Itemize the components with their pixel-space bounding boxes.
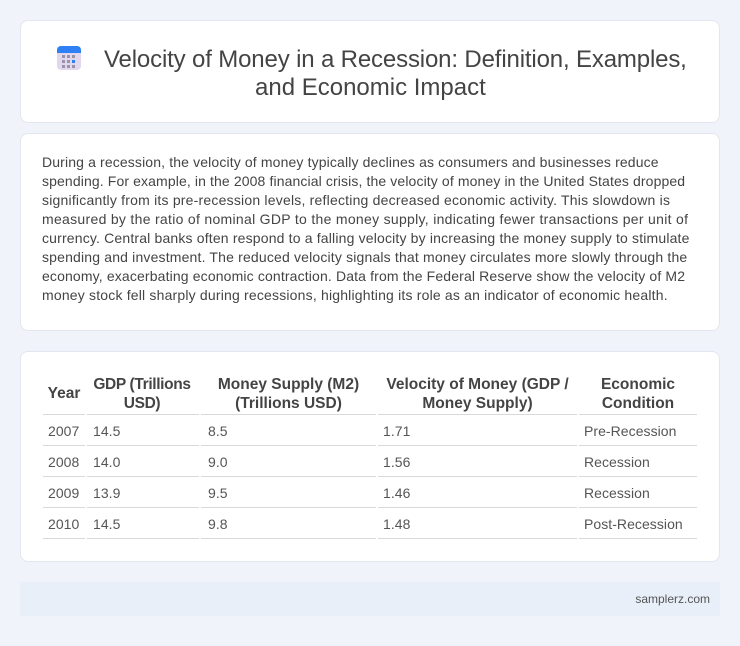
table row: 2010: 2010	[48, 516, 79, 532]
text block: description	[42, 154, 690, 303]
footer bar	[20, 582, 720, 616]
table header: Money Supply)	[422, 395, 533, 412]
table header: Condition	[602, 395, 674, 412]
table row: 2009: 13.9	[93, 485, 120, 501]
table row: 2008: Recession	[584, 454, 650, 470]
table row: 2009	[43, 485, 697, 508]
table row: 2010: 1.48	[383, 516, 410, 532]
table row: 2007: Pre-Recession	[584, 423, 676, 439]
table row: 2010	[43, 516, 697, 539]
table row: 2010: Post-Recession	[584, 516, 683, 532]
table row: 2010: 14.5	[93, 516, 120, 532]
icon: calendar	[57, 46, 81, 70]
panel: description	[20, 133, 720, 331]
table row: 2008: 1.56	[383, 454, 410, 470]
table row: 2008: 14.0	[93, 454, 120, 470]
table header: Velocity of Money (GDP /	[386, 376, 569, 393]
table row: 2009: Recession	[584, 485, 650, 501]
text block: description: money stock fell sharply during recessions, highlighting its role as an indicator of economic health.	[42, 287, 668, 303]
panel: data table	[20, 351, 720, 562]
text block: description: economy, exacerbating economic contraction. Data from the Federal Reserve show the velocity of M2	[42, 268, 685, 284]
table header: USD)	[124, 395, 160, 412]
footer text: samplerz.com	[635, 592, 710, 606]
panel: title	[20, 20, 720, 123]
table header: GDP (Trillions	[93, 376, 191, 393]
table header: Economic	[601, 376, 675, 393]
heading: line 1: Velocity of Money in a Recession: Definition, Examples,	[104, 46, 687, 73]
table row: 2007: 2007	[48, 423, 79, 439]
table row: 2007: 1.71	[383, 423, 410, 439]
table header: Year	[48, 385, 80, 402]
table row: 2008: 2008	[48, 454, 79, 470]
heading: line 2: and Economic Impact	[255, 74, 486, 101]
text block: description: spending and investment. The reduced velocity signals that money circulates more slowly through the	[42, 249, 687, 265]
table row: 2007	[43, 423, 697, 446]
table row: 2009: 9.5	[208, 485, 228, 501]
table row: 2007: 14.5	[93, 423, 120, 439]
table header: (Trillions USD)	[235, 395, 342, 412]
text block: description: spending. For example, in the 2008 financial crisis, the velocity of money in the United States dropped	[42, 173, 685, 189]
text block: description: currency. Central banks often respond to a falling velocity by increasing the money supply to stimulate	[42, 230, 690, 246]
text block: description: measured by the ratio of nominal GDP to the money supply, indicating fewer transactions per unit of	[42, 211, 688, 227]
text block: description: During a recession, the velocity of money typically declines as consumers and businesses reduce	[42, 154, 659, 170]
text block: description: significantly from its pre-recession levels, reflecting decreased economic activity. This slowdown is	[42, 192, 670, 208]
table row: 2007: 8.5	[208, 423, 228, 439]
table row: 2009: 2009	[48, 485, 79, 501]
table row: 2008	[43, 454, 697, 477]
table row: 2010: 9.8	[208, 516, 228, 532]
table header	[43, 376, 697, 415]
table row: 2008: 9.0	[208, 454, 228, 470]
table header: Money Supply (M2)	[218, 376, 359, 393]
table row: 2009: 1.46	[383, 485, 410, 501]
